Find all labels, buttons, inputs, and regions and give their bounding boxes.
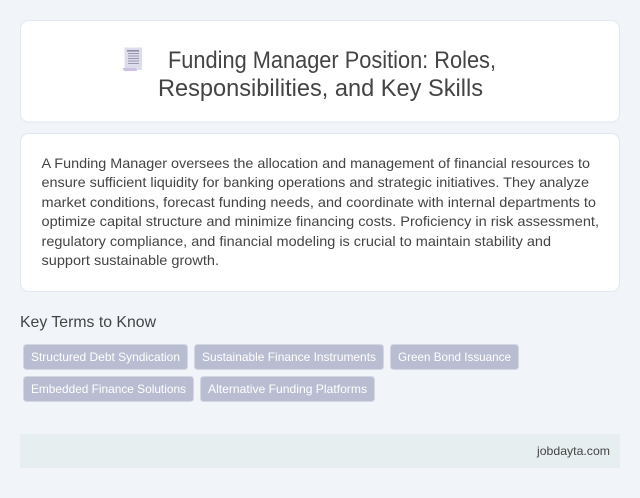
tag: embedded finance solutions <box>24 376 194 402</box>
tag: sustainable finance instruments: Sustainable Finance Instruments <box>202 350 376 364</box>
description text: regulatory compliance, and financial modeling is crucial to maintain stability and <box>42 233 551 249</box>
tag: green bond issuance <box>390 344 518 370</box>
description text: optimize capital structure and minimize financing costs. Proficiency in risk assessment, <box>42 213 599 229</box>
description text: A Funding Manager oversees the allocation and management of financial resources to <box>42 155 590 171</box>
panel: description card <box>20 134 620 292</box>
tag: structured debt syndication <box>24 344 188 370</box>
description text: market conditions, forecast funding needs, and coordinate with internal departments to <box>42 194 596 210</box>
tag: alternative funding platforms <box>200 376 374 402</box>
footer bar <box>20 434 620 468</box>
tag: green bond issuance: Green Bond Issuance <box>398 350 511 364</box>
title heading <box>158 47 496 102</box>
tag: sustainable finance instruments <box>194 344 384 370</box>
footer source text: jobdayta.com <box>536 444 610 458</box>
description text: support sustainable growth. <box>42 252 219 268</box>
heading: key terms: Key Terms to Know <box>20 314 156 331</box>
icon: paper scroll document <box>123 48 142 71</box>
panel: title card <box>20 20 620 122</box>
tag list <box>24 344 518 402</box>
tag: embedded finance solutions: Embedded Finance Solutions <box>31 382 186 396</box>
tag: structured debt syndication: Structured Debt Syndication <box>31 350 180 364</box>
description text <box>42 155 599 268</box>
description text: ensure sufficient liquidity for banking operations and strategic initiatives. They analyze <box>42 174 589 190</box>
title heading: Responsibilities, and Key Skills <box>158 75 483 102</box>
tag: alternative funding platforms: Alternative Funding Platforms <box>208 382 367 396</box>
title heading: Funding Manager Position: Roles, <box>168 47 496 74</box>
